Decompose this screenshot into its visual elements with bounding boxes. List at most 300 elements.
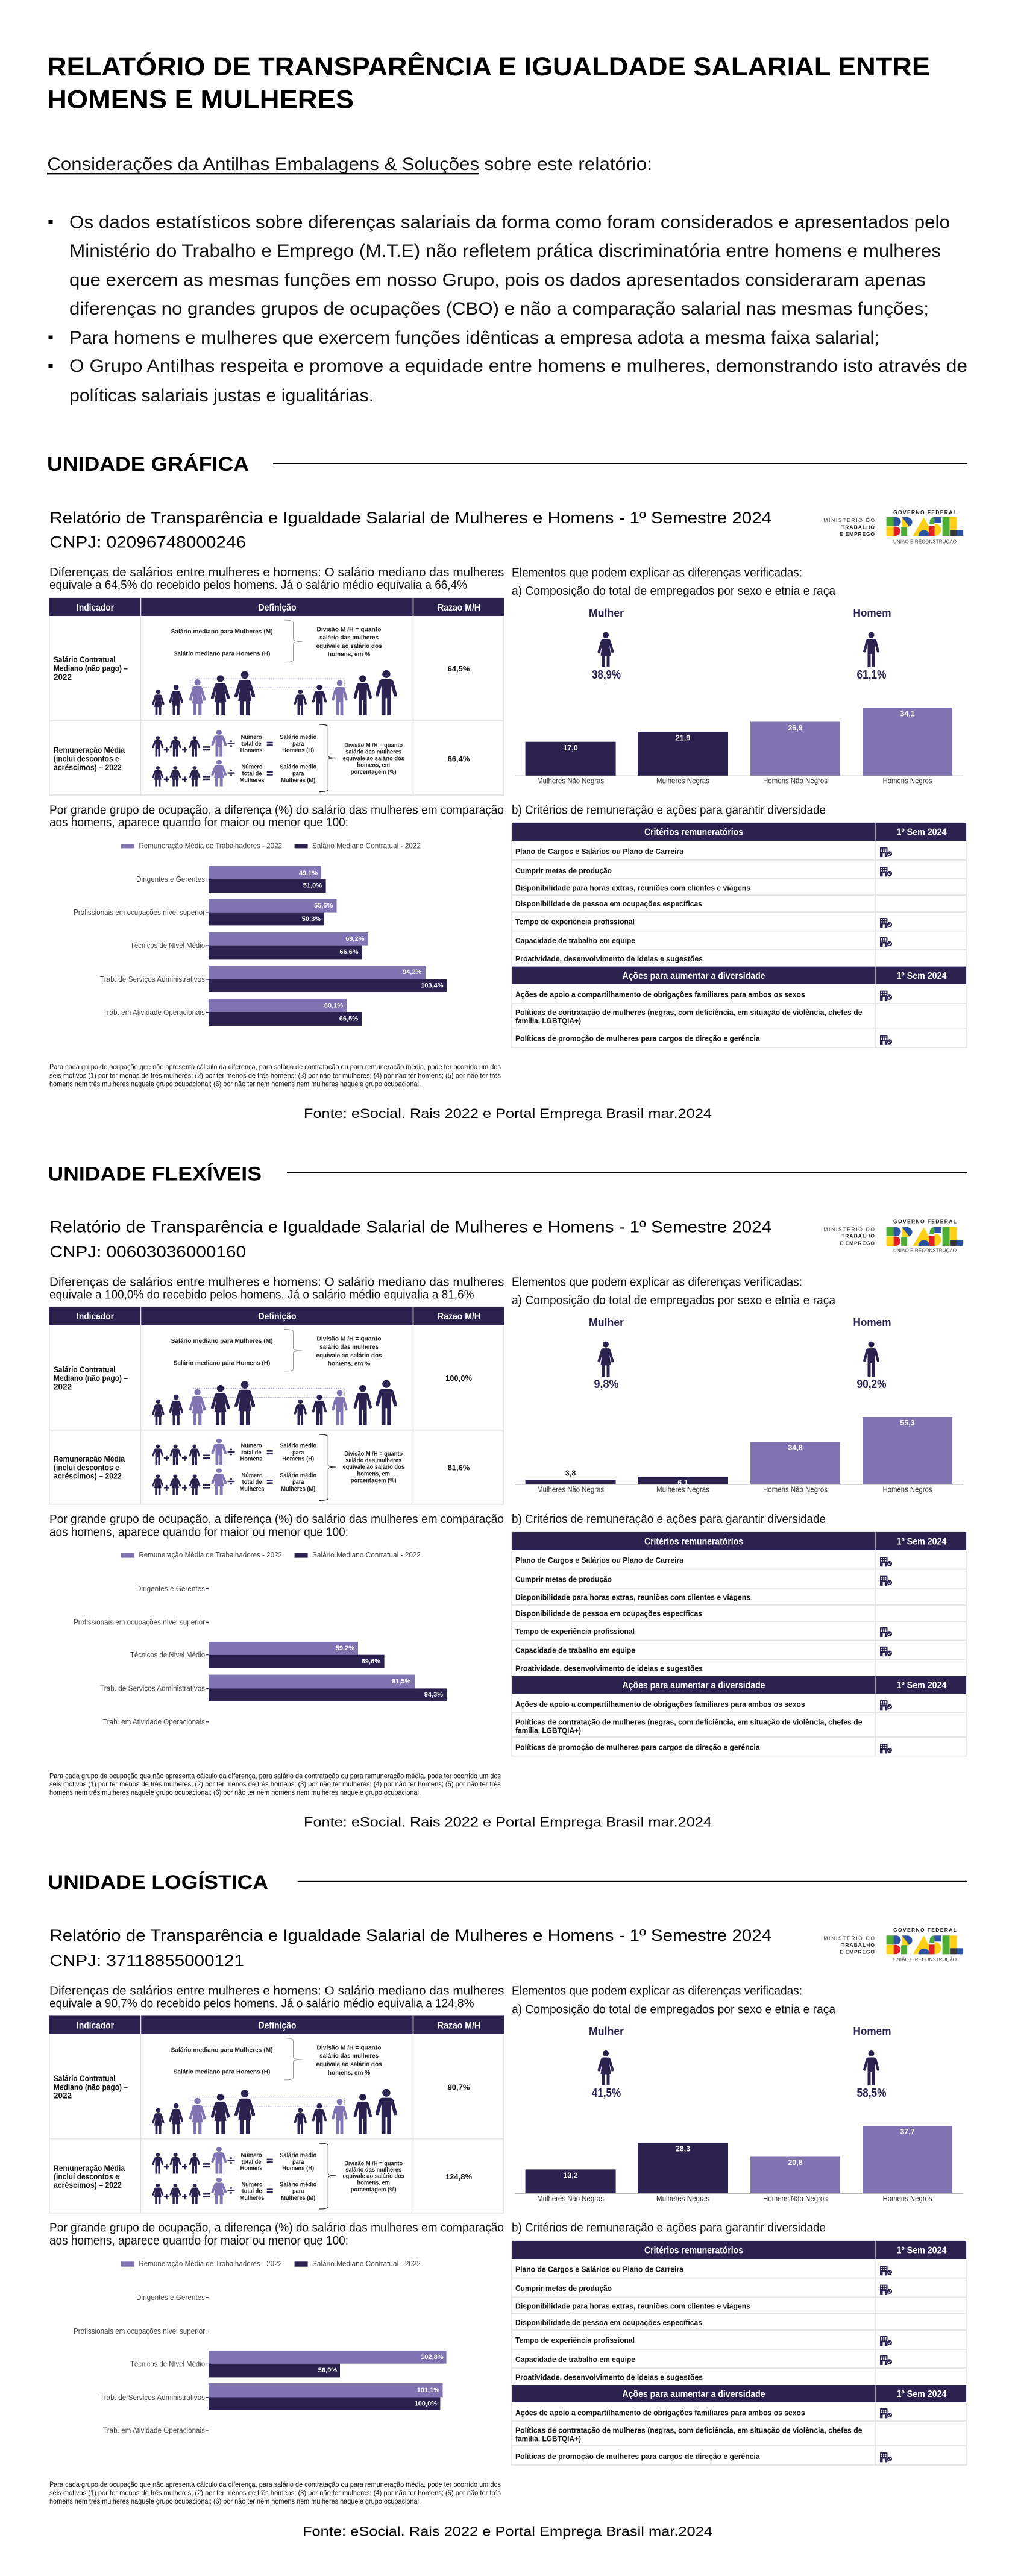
chart: occupation groups: Técnicos de Nível Médio (130, 1651, 205, 1659)
chart: occupation groups (74, 1551, 447, 1726)
footnote: seis motivos:(1) por ter menos de três mulheres; (2) por ter menos de três homens; (3) por não ter mulheres; (4) por não ter homens; (5) por não ter três (49, 1780, 501, 1788)
logo: Ministério do Trabalho e Governo Federal: GOVERNO FEDERAL (893, 1219, 957, 1225)
logo: Ministério do Trabalho e Governo Federal (823, 509, 963, 544)
report title and CNPJ: CNPJ: 37118855000121 (49, 1952, 244, 1970)
row: remuneração média: para (292, 2158, 304, 2166)
bar chart: race and sex: Homens Negros (882, 777, 932, 785)
stat: woman share: 9,8% (594, 1378, 619, 1391)
legend: Salário Mediano Contratual - 2022 (312, 2260, 421, 2268)
icon: building check (880, 1647, 892, 1656)
text block: occupation intro: Por grande grupo de ocupação, a diferença (%) do salário das mulheres em comparação (49, 2222, 504, 2235)
stat: woman share (589, 1316, 624, 1391)
text block: salary differences (49, 566, 504, 592)
icon: building check (880, 2452, 892, 2463)
bar chart: race and sex: 28,3 (676, 2144, 690, 2153)
legend: Salário Mediano Contratual - 2022 (312, 841, 421, 850)
row: remuneração média: homens, em (357, 2179, 390, 2187)
source note: Fonte: eSocial. Rais 2022 e Portal Emprega Brasil mar.2024 (304, 1815, 712, 1830)
icon: building check (880, 918, 892, 928)
row: remuneração média: Mulheres (240, 1485, 265, 1492)
row: salário contratual mediano: salário das mulheres (319, 1343, 379, 1351)
row: remuneração média: Remuneração Média (54, 2164, 125, 2173)
row: remuneração média: Salário médio (280, 1442, 316, 1449)
text block: elements intro (512, 566, 836, 598)
row: remuneração média: Salário médio (280, 2181, 316, 2188)
row: salário contratual mediano: Salário mediano para Mulheres (M) (171, 1337, 272, 1345)
logo: Ministério do Trabalho e Governo Federal (823, 1219, 963, 1253)
legend: Remuneração Média de Trabalhadores - 2022 (139, 2260, 282, 2268)
row: remuneração média (54, 724, 470, 792)
chart: occupation groups: 101,1% (417, 2387, 439, 2394)
row: remuneração média: Mulheres (240, 2194, 265, 2202)
text block: occupation intro (49, 2222, 504, 2248)
row: salário contratual mediano: Salário mediano para Mulheres (M) (171, 2046, 272, 2053)
bar chart: race and sex: 37,7 (900, 2128, 915, 2136)
row: remuneração média: equivale ao salário dos (342, 755, 404, 762)
row: remuneração média: Homens (240, 747, 263, 754)
text block: salary differences (49, 1985, 504, 2010)
footnote: homens nem três mulheres naquele grupo ocupacional; (6) por não ter nem homens nem mulheres naquele grupo ocupacional. (49, 1788, 421, 1797)
row: remuneração média: total de (242, 2188, 262, 2195)
text block: elements intro: Elementos que podem explicar as diferenças verificadas: (512, 1275, 802, 1289)
row: salário contratual mediano (54, 2038, 470, 2134)
row: salário contratual mediano: Divisão M /H = quanto (317, 2044, 381, 2052)
table: criteria and actions: 1º Sem 2024 (897, 2246, 947, 2255)
row: remuneração média: Homens (240, 1455, 263, 1462)
text block: bullet list: que exercem as mesmas funções em nosso Grupo, pois os dados apresentados consideraram apenas (69, 270, 926, 291)
row: salário contratual mediano: Mediano (não pago) – (54, 2082, 128, 2091)
row: remuneração média: acréscimos) – 2022 (54, 763, 122, 772)
row: remuneração média: 81,6% (448, 1463, 470, 1472)
table: criteria and actions: Disponibilidade de pessoa em ocupações específicas (515, 1609, 702, 1618)
row: remuneração média: salário das mulheres (345, 749, 401, 756)
row: remuneração média: acréscimos) – 2022 (54, 2181, 122, 2190)
logo: Ministério do Trabalho e Governo Federal: UNIÃO E RECONSTRUÇÃO (893, 1957, 957, 1962)
row: salário contratual mediano: Salário mediano para Homens (H) (174, 2068, 270, 2075)
text block: bullet list (48, 212, 967, 406)
row: salário contratual mediano: Salário Contratual (54, 655, 116, 664)
text block: occupation intro (49, 804, 504, 829)
icon: building check (880, 1627, 892, 1637)
table: criteria and actions (512, 804, 966, 1048)
report title and CNPJ (49, 1218, 771, 1261)
row: remuneração média: Salário médio (280, 763, 316, 770)
row: remuneração média: porcentagem (%) (351, 1477, 397, 1484)
footnote: Para cada grupo de ocupação que não apresenta cálculo da diferença, para salário de contratação ou para remuneração média, pode ter ocorrido um dos (49, 1063, 501, 1071)
bar chart: race and sex: 34,1 (900, 710, 915, 718)
subheading: considerations (47, 154, 652, 174)
row: salário contratual mediano: salário das mulheres (319, 2052, 379, 2059)
row: remuneração média: total de (241, 1449, 262, 1456)
table: criteria and actions: b) Critérios de remuneração e ações para garantir diversidade (512, 2222, 826, 2235)
table: criteria and actions (512, 1513, 966, 1756)
row: salário contratual mediano: 2022 (54, 673, 72, 682)
row: remuneração média: para (292, 1449, 304, 1456)
bar chart: race and sex: 55,3 (900, 1419, 915, 1427)
row: remuneração média: total de (241, 2158, 262, 2166)
row: remuneração média: salário das mulheres (345, 1457, 401, 1464)
stat: man share (853, 607, 891, 682)
panel: report Unidade Gráfica (49, 509, 966, 1121)
stat: man share (853, 1316, 891, 1391)
table: criteria and actions: Plano de Cargos e Salários ou Plano de Carreira (515, 847, 684, 856)
table: indicators: Indicador (77, 603, 114, 613)
icon: building check (880, 2336, 892, 2346)
table: indicators: Indicador (77, 1312, 114, 1322)
text block: elements intro (512, 1275, 836, 1307)
subheading: considerations: Considerações da Antilhas Embalagens & Soluções (47, 154, 479, 174)
chart: occupation groups: 51,0% (303, 882, 322, 890)
bar chart: race and sex: Mulheres Não Negras (537, 777, 604, 785)
chart: occupation groups: Trab. em Atividade Operacionais (103, 1718, 205, 1726)
row: remuneração média: acréscimos) – 2022 (54, 1472, 122, 1481)
footnote: Para cada grupo de ocupação que não apresenta cálculo da diferença, para salário de contratação ou para remuneração média, pode ter ocorrido um dos (49, 1771, 501, 1780)
icon: building check (880, 937, 892, 947)
table: criteria and actions: Cumprir metas de produção (515, 2284, 612, 2293)
table: criteria and actions: Políticas de promoção de mulheres para cargos de direção e gerência (515, 1743, 761, 1751)
row: remuneração média: Salário médio (280, 734, 316, 741)
source note: Fonte: eSocial. Rais 2022 e Portal Emprega Brasil mar.2024 (303, 2524, 712, 2539)
text block: salary differences: equivale a 90,7% do recebido pelos homens. Já o salário médio equivalia a 124,8% (49, 1997, 474, 2010)
row: remuneração média: (inclui descontos e (54, 755, 119, 764)
text block: occupation intro: Por grande grupo de ocupação, a diferença (%) do salário das mulheres em comparação (49, 804, 504, 817)
table: indicators: Razao M/H (438, 603, 480, 613)
text block: salary differences: equivale a 64,5% do recebido pelos homens. Já o salário médio equivalia a 66,4% (49, 579, 467, 592)
row: remuneração média: total de (242, 1478, 262, 1486)
row: remuneração média: salário das mulheres (345, 2166, 401, 2173)
row: salário contratual mediano: Salário mediano para Mulheres (M) (171, 628, 272, 635)
row: remuneração média: (inclui descontos e (54, 1463, 119, 1472)
report title and CNPJ: Relatório de Transparência e Igualdade Salarial de Mulheres e Homens - 1º Semestre 2024 (49, 1218, 771, 1236)
logo: Ministério do Trabalho e Governo Federal: TRABALHO (841, 524, 875, 530)
chart: occupation groups: 50,3% (302, 916, 321, 923)
text block: salary differences: Diferenças de salários entre mulheres e homens: O salário mediano das mulheres (49, 1275, 504, 1289)
stat: woman share (589, 607, 624, 682)
bar chart: race and sex: Homens Negros (882, 2194, 932, 2203)
footnote: homens nem três mulheres naquele grupo ocupacional; (6) por não ter nem homens nem mulheres naquele grupo ocupacional. (49, 2497, 421, 2505)
table: criteria and actions: Disponibilidade para horas extras, reuniões com clientes e viagens (515, 2302, 750, 2311)
bar chart: race and sex: Homens Negros (882, 1485, 932, 1494)
table: criteria and actions: Disponibilidade de pessoa em ocupações específicas (515, 900, 702, 908)
row: remuneração média: total de (241, 740, 262, 747)
row: salário contratual mediano: Divisão M /H = quanto (317, 626, 381, 633)
panel: report Unidade Flexíveis (49, 1218, 966, 1830)
text block: bullet list: políticas salariais justas e igualitárias. (69, 386, 374, 406)
row: remuneração média: para (292, 740, 304, 747)
logo: Ministério do Trabalho e Governo Federal: TRABALHO (841, 1233, 875, 1239)
table: criteria and actions: Capacidade de trabalho em equipe (515, 1647, 635, 1655)
bar chart: race and sex (515, 1417, 963, 1494)
row: salário contratual mediano: salário das mulheres (319, 634, 379, 641)
logo: Ministério do Trabalho e Governo Federal: MINISTÉRIO DO (823, 517, 875, 523)
bar chart: race and sex: 17,0 (563, 744, 578, 752)
stat: man share: 90,2% (857, 1378, 887, 1391)
table: criteria and actions: Políticas de promoção de mulheres para cargos de direção e gerência (515, 2452, 761, 2461)
row: salário contratual mediano: Mediano (não pago) – (54, 1374, 128, 1383)
table: criteria and actions: Disponibilidade para horas extras, reuniões com clientes e viagens (515, 884, 750, 892)
row: remuneração média: Remuneração Média (54, 746, 125, 755)
row: remuneração média: Número (241, 1442, 262, 1449)
stat: woman share: 38,9% (592, 668, 621, 682)
row: remuneração média: Mulheres (240, 776, 265, 784)
title: RELATÓRIO DE TRANSPARÊNCIA E IGUALDADE SALARIAL ENTRE (47, 52, 930, 81)
table: criteria and actions: Capacidade de trabalho em equipe (515, 2355, 635, 2364)
table: criteria and actions: Critérios remuneratórios (644, 827, 743, 838)
stat: woman share: 41,5% (592, 2087, 621, 2100)
text block: occupation intro: aos homens, aparece quando for maior ou menor que 100: (49, 1526, 348, 1539)
text block: salary differences: equivale a 100,0% do recebido pelos homens. Já o salário médio equivalia a 81,6% (49, 1289, 474, 1302)
table: criteria and actions: Critérios remuneratórios (644, 2246, 743, 2255)
icon: building check (880, 867, 892, 876)
row: remuneração média: Homens (H) (282, 1455, 314, 1462)
section heading: Unidade Logística: UNIDADE LOGÍSTICA (48, 1871, 268, 1893)
row: remuneração média (54, 2143, 472, 2209)
chart: occupation groups: Dirigentes e Gerentes (136, 875, 205, 884)
icon: building check (880, 2266, 892, 2276)
row: salário contratual mediano (54, 1330, 472, 1425)
text block: salary differences: Diferenças de salários entre mulheres e homens: O salário mediano das mulheres (49, 1985, 504, 1998)
row: remuneração média: para (292, 770, 304, 778)
report title and CNPJ (49, 509, 771, 551)
report title and CNPJ: CNPJ: 00603036000160 (49, 1243, 246, 1261)
report title and CNPJ (49, 1926, 771, 1970)
text block: bullet list: Os dados estatísticos sobre diferenças salariais da forma como foram considerados e apresentados pelo (69, 212, 950, 233)
chart: occupation groups: 59,2% (336, 1645, 354, 1652)
logo: Ministério do Trabalho e Governo Federal: UNIÃO E RECONSTRUÇÃO (893, 539, 957, 544)
table: criteria and actions: Plano de Cargos e Salários ou Plano de Carreira (515, 1556, 684, 1565)
bar chart: race and sex: 26,9 (788, 724, 803, 732)
row: remuneração média: Divisão M /H = quanto (344, 1450, 403, 1457)
table: criteria and actions: 1º Sem 2024 (897, 2389, 947, 2399)
table: criteria and actions: Ações de apoio a compartilhamento de obrigações familiares para ambos os sexos (515, 2408, 805, 2417)
title (47, 52, 930, 115)
report title and CNPJ: CNPJ: 02096748000246 (49, 533, 246, 551)
chart: occupation groups: 60,1% (324, 1002, 343, 1009)
bar chart: race and sex: 3,8 (565, 1469, 576, 1478)
table: indicators (49, 2015, 504, 2213)
chart: occupation groups: Profissionais em ocupações nível superior (74, 2327, 205, 2336)
chart: occupation groups: Dirigentes e Gerentes (136, 1585, 205, 1593)
title: HOMENS E MULHERES (47, 86, 354, 115)
row: remuneração média: equivale ao salário dos (342, 2172, 404, 2179)
table: criteria and actions: Tempo de experiência profissional (515, 2336, 635, 2345)
panel: report Unidade Logística (49, 1926, 966, 2539)
chart: composition by sex (515, 607, 963, 785)
table: criteria and actions: Plano de Cargos e Salários ou Plano de Carreira (515, 2265, 684, 2273)
stat: man share (853, 2025, 891, 2100)
row: salário contratual mediano: 2022 (54, 2091, 72, 2100)
text block: elements intro: a) Composição do total de empregados por sexo e etnia e raça (512, 585, 836, 598)
row: remuneração média: Salário médio (280, 1472, 316, 1479)
table: criteria and actions: Critérios remuneratórios (644, 1537, 743, 1547)
footnote: Para cada grupo de ocupação que não apresenta cálculo da diferença, para salário de contratação ou para remuneração média, pode ter ocorrido um dos (49, 2480, 501, 2489)
row: remuneração média: Mulheres (M) (281, 776, 315, 784)
table: indicators: Razao M/H (438, 2020, 480, 2031)
icon: building check (880, 2285, 892, 2295)
section heading: Unidade Flexíveis: UNIDADE FLEXÍVEIS (48, 1163, 262, 1184)
stat: woman share: Mulher (589, 607, 624, 619)
chart: occupation groups: 100,0% (415, 2401, 437, 2408)
table: criteria and actions: família, LGBTQIA+) (515, 2435, 581, 2443)
row: salário contratual mediano: 100,0% (445, 1374, 472, 1383)
stat: woman share (589, 2025, 624, 2100)
table: criteria and actions: família, LGBTQIA+) (515, 1726, 581, 1735)
icon: building check (880, 1557, 892, 1567)
table: criteria and actions: 1º Sem 2024 (897, 971, 947, 981)
chart: occupation groups: 94,3% (424, 1691, 443, 1698)
table: criteria and actions: Disponibilidade para horas extras, reuniões com clientes e viagens (515, 1594, 750, 1602)
bar chart: race and sex: Homens Não Negros (763, 1485, 828, 1494)
chart: occupation groups: Profissionais em ocupações nível superior (74, 908, 205, 917)
text block: salary differences: Diferenças de salários entre mulheres e homens: O salário mediano das mulheres (49, 566, 504, 579)
icon: building check (880, 1700, 892, 1711)
footnote (49, 1063, 501, 1089)
bar chart: race and sex: 13,2 (563, 2172, 578, 2180)
text block: elements intro: a) Composição do total de empregados por sexo e etnia e raça (512, 1294, 836, 1307)
icon: building check (880, 847, 892, 857)
icon: building check (880, 1035, 892, 1045)
bar chart: race and sex: Mulheres Não Negras (537, 2194, 604, 2203)
table: criteria and actions: Ações de apoio a compartilhamento de obrigações familiares para ambos os sexos (515, 1700, 805, 1709)
report title and CNPJ: Relatório de Transparência e Igualdade Salarial de Mulheres e Homens - 1º Semestre 2024 (49, 1926, 771, 1944)
text block: bullet list: O Grupo Antilhas respeita e promove a equidade entre homens e mulheres, demonstrando isto através de (69, 356, 967, 376)
row: remuneração média: para (292, 2188, 304, 2195)
table: indicators (49, 598, 504, 795)
report title and CNPJ: Relatório de Transparência e Igualdade Salarial de Mulheres e Homens - 1º Semestre 2024 (49, 509, 771, 527)
text block: salary differences (49, 1275, 504, 1302)
row: remuneração média: homens, em (357, 1471, 390, 1478)
chart: occupation groups: 55,6% (314, 902, 333, 909)
stat: woman share: Mulher (589, 1316, 624, 1328)
row: remuneração média: equivale ao salário dos (342, 1463, 404, 1471)
table: criteria and actions: 1º Sem 2024 (897, 1537, 947, 1547)
chart: composition by sex (515, 2025, 963, 2203)
chart: occupation groups: Trab. em Atividade Operacionais (103, 2426, 205, 2434)
table: criteria and actions: Capacidade de trabalho em equipe (515, 937, 635, 945)
stat: man share: Homem (853, 2025, 891, 2037)
table: criteria and actions: Proatividade, desenvolvimento de ideias e sugestões (515, 955, 703, 963)
table: criteria and actions: b) Critérios de remuneração e ações para garantir diversidade (512, 804, 826, 817)
bar chart: race and sex: Mulheres Não Negras (537, 1485, 604, 1494)
bar chart: race and sex: 20,8 (788, 2158, 803, 2167)
chart: occupation groups: Trab. de Serviços Administrativos (100, 2393, 205, 2402)
legend: Remuneração Média de Trabalhadores - 2022 (139, 1551, 282, 1559)
row: salário contratual mediano: Salário Contratual (54, 2074, 116, 2083)
chart: occupation groups: 56,9% (318, 2367, 337, 2374)
bar chart: race and sex: 21,9 (676, 734, 690, 743)
stat: man share: Homem (853, 1316, 891, 1328)
bar chart: race and sex: Mulheres Negras (656, 2194, 709, 2203)
chart: occupation groups: 69,2% (345, 935, 365, 943)
row: remuneração média: Mulheres (M) (281, 2194, 315, 2202)
row: salário contratual mediano: homens, em % (328, 651, 371, 658)
footnote (49, 1771, 501, 1797)
row: remuneração média: Número (241, 763, 263, 770)
row: salário contratual mediano: equivale ao salário dos (316, 1352, 382, 1359)
legend: Salário Mediano Contratual - 2022 (312, 1551, 421, 1559)
table: criteria and actions: Ações para aumentar a diversidade (622, 971, 765, 981)
row: remuneração média: porcentagem (%) (351, 2186, 397, 2193)
text block: occupation intro: Por grande grupo de ocupação, a diferença (%) do salário das mulheres em comparação (49, 1513, 504, 1526)
logo: Ministério do Trabalho e Governo Federal: MINISTÉRIO DO (823, 1935, 875, 1941)
row: salário contratual mediano: equivale ao salário dos (316, 642, 382, 650)
table: indicators: Definição (258, 603, 297, 613)
chart: occupation groups: 102,8% (421, 2354, 444, 2361)
table: criteria and actions: Proatividade, desenvolvimento de ideias e sugestões (515, 2373, 703, 2382)
logo: Ministério do Trabalho e Governo Federal: E EMPREGO (840, 1240, 875, 1246)
chart: occupation groups (74, 841, 447, 1026)
text block: elements intro: Elementos que podem explicar as diferenças verificadas: (512, 1985, 802, 1998)
table: criteria and actions: 1º Sem 2024 (897, 827, 947, 838)
chart: occupation groups (74, 2260, 447, 2434)
row: remuneração média: Homens (H) (282, 747, 314, 754)
row: remuneração média: Salário médio (280, 2152, 316, 2159)
footnote (49, 2480, 501, 2505)
chart: occupation groups: Trab. em Atividade Operacionais (103, 1008, 205, 1017)
row: remuneração média: Número (241, 1472, 263, 1479)
row: salário contratual mediano: Salário Contratual (54, 1365, 116, 1374)
icon: building check (880, 1576, 892, 1586)
logo: Ministério do Trabalho e Governo Federal (823, 1927, 963, 1962)
row: remuneração média: Número (241, 2152, 262, 2159)
row: remuneração média: Homens (H) (282, 2165, 314, 2172)
text block: occupation intro: aos homens, aparece quando for maior ou menor que 100: (49, 816, 348, 829)
chart: occupation groups: Trab. de Serviços Administrativos (100, 1685, 205, 1693)
logo: Ministério do Trabalho e Governo Federal: GOVERNO FEDERAL (893, 509, 957, 515)
row: salário contratual mediano: homens, em % (328, 2069, 371, 2076)
chart: occupation groups: 94,2% (403, 969, 422, 976)
row: remuneração média (54, 1434, 470, 1500)
table: criteria and actions: Proatividade, desenvolvimento de ideias e sugestões (515, 1665, 703, 1673)
row: remuneração média: total de (242, 770, 262, 778)
logo: Ministério do Trabalho e Governo Federal: GOVERNO FEDERAL (893, 1927, 957, 1933)
row: remuneração média: Divisão M /H = quanto (344, 2160, 403, 2167)
bar chart: race and sex: 6,1 (677, 1478, 688, 1487)
text block: bullet list: Ministério do Trabalho e Emprego (M.T.E) não refletem prática discriminatória entre homens e mulheres (69, 241, 941, 261)
chart: occupation groups: 69,6% (362, 1658, 380, 1665)
logo: Ministério do Trabalho e Governo Federal: UNIÃO E RECONSTRUÇÃO (893, 1248, 957, 1253)
chart: occupation groups: Dirigentes e Gerentes (136, 2293, 205, 2302)
chart: occupation groups: 49,1% (299, 870, 318, 877)
bar chart: race and sex: Homens Não Negros (763, 777, 828, 785)
chart: occupation groups: Técnicos de Nível Médio (130, 2360, 205, 2369)
row: salário contratual mediano: Divisão M /H = quanto (317, 1336, 381, 1343)
table: criteria and actions: Ações para aumentar a diversidade (622, 2389, 765, 2399)
chart: composition by sex (515, 1316, 963, 1494)
legend (121, 841, 421, 850)
table: indicators: Razao M/H (438, 1312, 480, 1322)
table: criteria and actions: b) Critérios de remuneração e ações para garantir diversidade (512, 1513, 826, 1526)
row: remuneração média: Mulheres (M) (281, 1485, 315, 1492)
bar chart: race and sex (515, 708, 963, 785)
chart: occupation groups: 66,5% (339, 1016, 358, 1023)
footnote: seis motivos:(1) por ter menos de três mulheres; (2) por ter menos de três homens; (3) por não ter mulheres; (4) por não ter homens; (5) por não ter três (49, 2489, 501, 2497)
row: remuneração média: homens, em (357, 762, 390, 769)
table: criteria and actions: Ações para aumentar a diversidade (622, 1680, 765, 1691)
bar chart: race and sex: Mulheres Negras (656, 1485, 709, 1494)
table: indicators: Definição (258, 1312, 297, 1322)
logo: Ministério do Trabalho e Governo Federal: TRABALHO (841, 1942, 875, 1948)
stat: man share: 61,1% (857, 668, 887, 682)
bar chart: race and sex: 34,8 (788, 1444, 803, 1452)
stat: woman share: Mulher (589, 2025, 624, 2037)
row: salário contratual mediano: Salário mediano para Homens (H) (174, 1360, 270, 1367)
bar chart: race and sex: Homens Não Negros (763, 2194, 828, 2203)
table: criteria and actions: Cumprir metas de produção (515, 1575, 612, 1584)
table: criteria and actions (512, 2222, 966, 2465)
row: remuneração média: Divisão M /H = quanto (344, 741, 403, 749)
bar chart: race and sex (515, 2126, 963, 2203)
